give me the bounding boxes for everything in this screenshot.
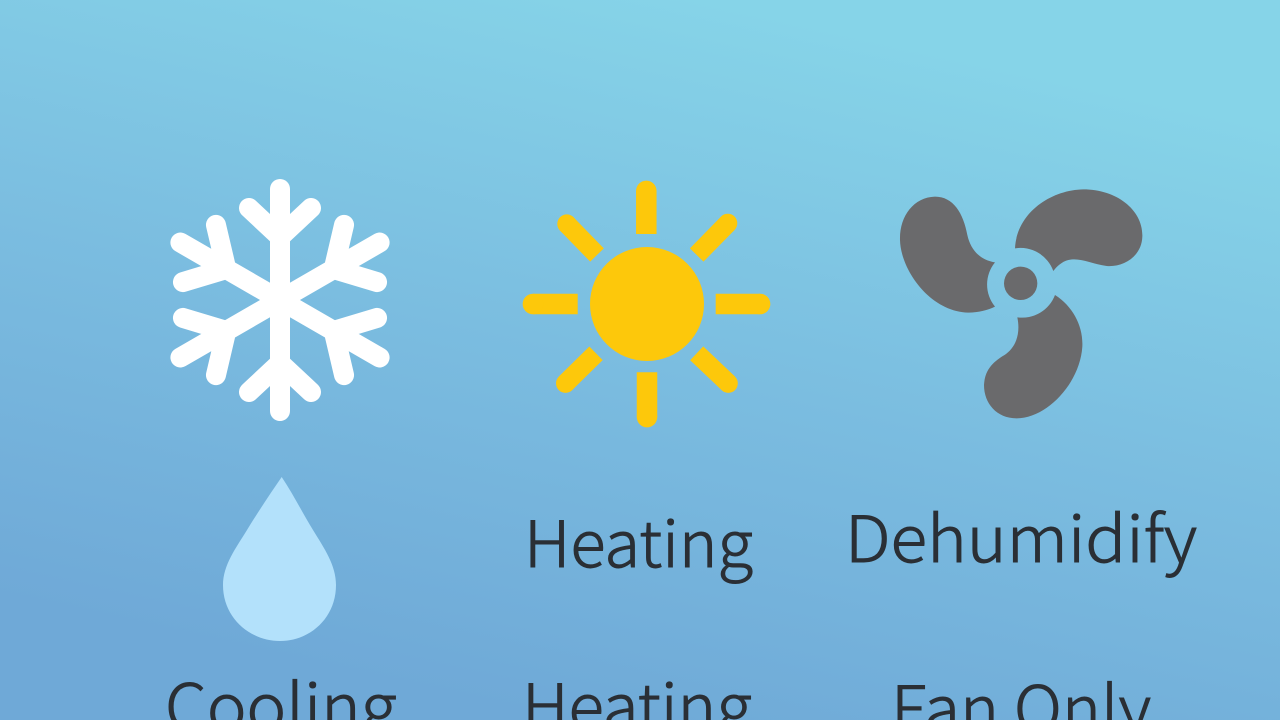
icon: water drop [223,477,336,641]
label: Heating (upper): Heating [524,494,753,586]
icon: fan [900,189,1142,418]
label: Dehumidify: Dehumidify [845,489,1197,581]
icon: sun [533,191,760,417]
icon: snowflake [164,189,396,411]
